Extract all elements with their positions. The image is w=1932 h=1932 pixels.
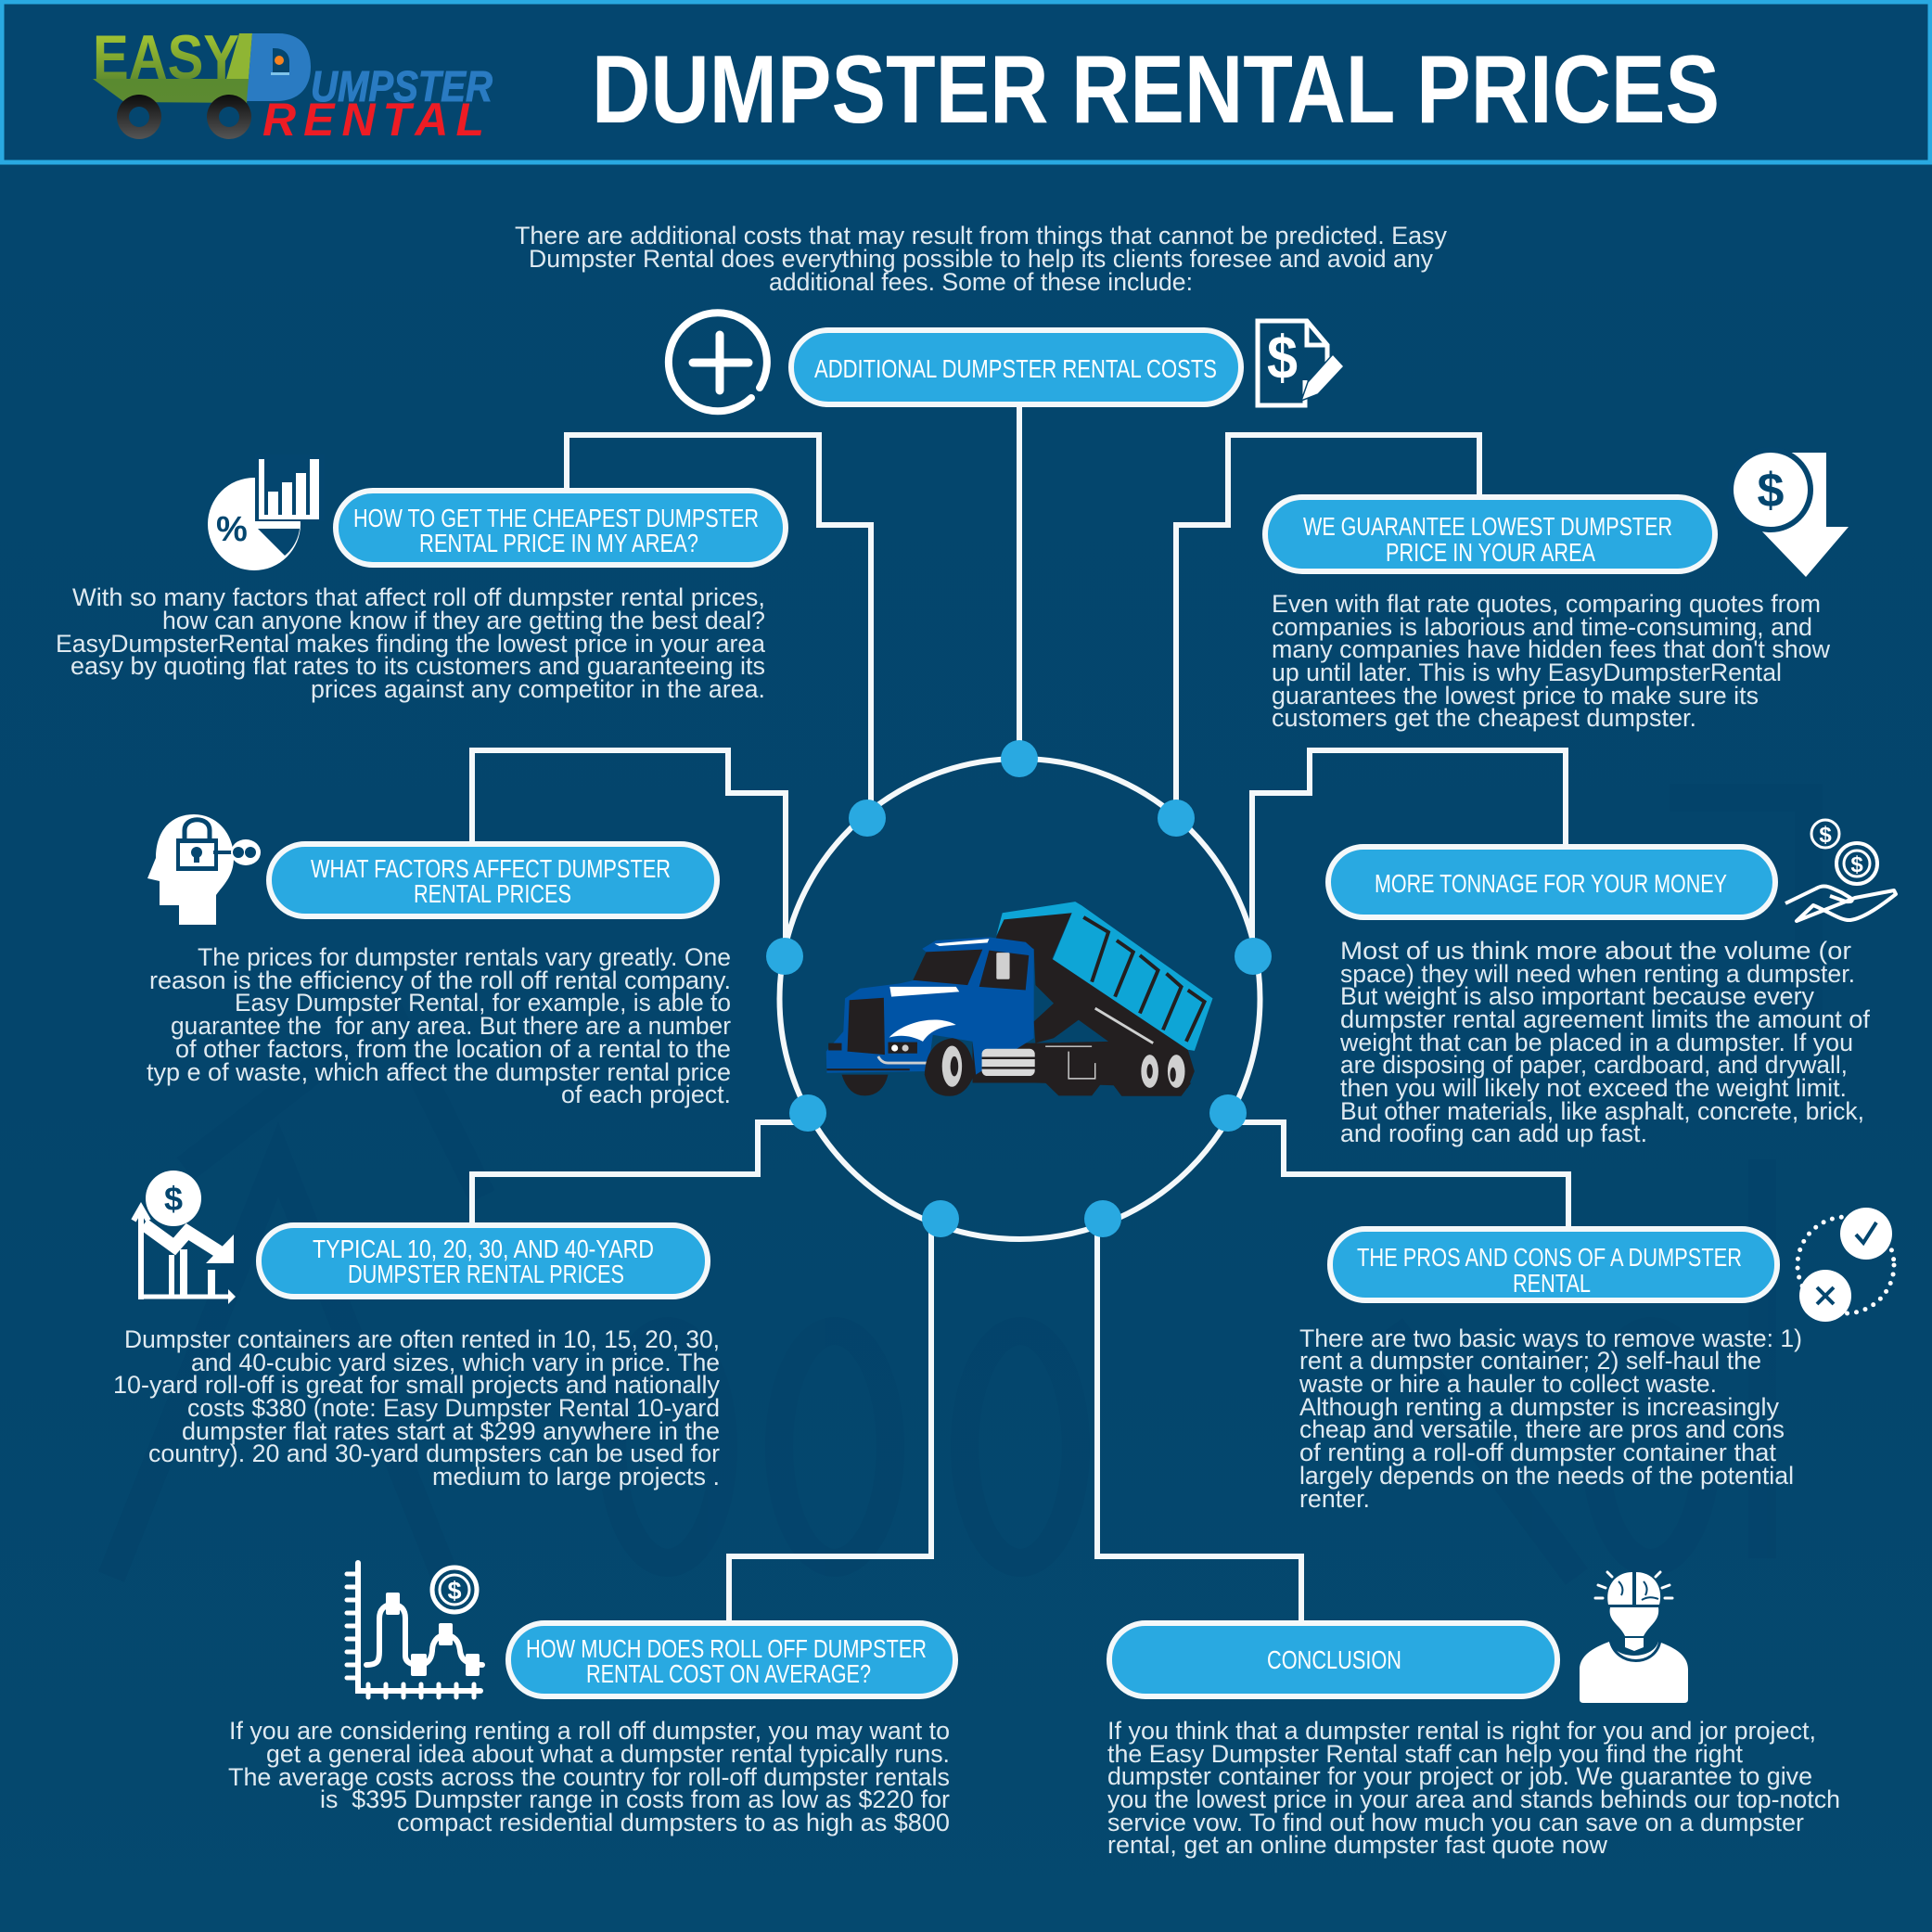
body text: easy by quoting flat rates to its customers and guaranteeing its bbox=[70, 652, 765, 680]
icon: hand with coins: $ bbox=[1850, 852, 1863, 877]
heading pill: ADDITIONAL DUMPSTER RENTAL COSTS bbox=[814, 354, 1217, 383]
body text: dumpster rental agreement limits the amount of bbox=[1340, 1005, 1870, 1033]
body text: largely depends on the needs of the potential bbox=[1299, 1462, 1794, 1490]
body text: country). 20 and 30-yard dumpsters can be used for bbox=[148, 1439, 720, 1467]
intro text: Dumpster Rental does everything possible to help its clients foresee and avoid any bbox=[529, 245, 1433, 273]
body text: get a general idea about what a dumpster rental typically runs. bbox=[266, 1740, 950, 1768]
body text: reason is the efficiency of the roll off rental company. bbox=[149, 966, 731, 994]
body text: is $395 Dumpster range in costs from as low as $220 for bbox=[320, 1785, 950, 1813]
icon: dollar document with pencil: $ bbox=[1267, 323, 1298, 391]
body text: The prices for dumpster rentals vary greatly. One bbox=[198, 943, 731, 971]
body text: If you are considering renting a roll off dumpster, you may want to bbox=[229, 1717, 950, 1745]
body text bbox=[56, 583, 766, 703]
body text: are disposing of paper, cardboard, and drywall, bbox=[1340, 1051, 1848, 1079]
logo: Easy Dumpster Rental bbox=[93, 22, 493, 146]
icon: person with lightbulb brain bbox=[1580, 1572, 1688, 1703]
body text: customers get the cheapest dumpster. bbox=[1272, 704, 1696, 732]
icon: hand with coins: $ bbox=[1819, 823, 1832, 848]
body text: guarantees the lowest price to make sure its bbox=[1272, 682, 1759, 710]
body text: the Easy Dumpster Rental staff can help you find the right bbox=[1107, 1740, 1743, 1768]
body text bbox=[1272, 590, 1830, 732]
body text: space) they will need when renting a dumpster. bbox=[1340, 960, 1855, 988]
body text: rent a dumpster container; 2) self-haul the bbox=[1299, 1347, 1761, 1375]
body text: If you think that a dumpster rental is right for you and jor project, bbox=[1107, 1717, 1816, 1745]
body text: But weight is also important because every bbox=[1340, 982, 1814, 1010]
icon: roll-off dumpster truck bbox=[826, 902, 1212, 1096]
body text: of renting a roll-off dumpster container that bbox=[1299, 1439, 1777, 1466]
icon: pie chart with bars bbox=[208, 454, 325, 570]
panel: we guarantee lowest price bbox=[1265, 447, 1849, 732]
body text bbox=[113, 1325, 720, 1491]
icon: dollar document with pencil bbox=[1258, 321, 1344, 405]
heading pill: HOW MUCH DOES ROLL OFF DUMPSTER bbox=[526, 1634, 927, 1663]
body text: dumpster container for your project or job. We guarantee to give bbox=[1107, 1762, 1812, 1790]
body text: dumpster flat rates start at $299 anywhere in the bbox=[182, 1417, 720, 1445]
panel: typical sizes and prices bbox=[113, 1171, 720, 1491]
body text: costs $380 (note: Easy Dumpster Rental 10-yard bbox=[187, 1394, 720, 1422]
body text: Even with flat rate quotes, comparing quotes from bbox=[1272, 590, 1821, 618]
body text bbox=[1107, 1717, 1840, 1859]
panel: pros and cons bbox=[1299, 1208, 1894, 1513]
body text: The average costs across the country for roll-off dumpster rentals bbox=[228, 1763, 950, 1791]
body text: of each project. bbox=[561, 1081, 731, 1108]
body text: waste or hire a hauler to collect waste. bbox=[1299, 1370, 1717, 1398]
central circle with nodes bbox=[766, 740, 1272, 1239]
body text: service vow. To find out how much you can save on a dumpster bbox=[1107, 1809, 1804, 1836]
heading pill bbox=[336, 491, 786, 565]
panel: how much on average bbox=[228, 1563, 955, 1836]
heading pill: RENTAL bbox=[1513, 1269, 1591, 1298]
panel: additional dumpster rental costs bbox=[669, 313, 1344, 411]
icon: falling price chart: $ bbox=[164, 1180, 183, 1218]
body text: With so many factors that affect roll off dumpster rental prices, bbox=[72, 583, 765, 611]
icon: head with lock and key bbox=[147, 814, 261, 925]
body text: and roofing can add up fast. bbox=[1340, 1120, 1647, 1147]
heading pill bbox=[1328, 847, 1775, 917]
intro text: additional fees. Some of these include: bbox=[769, 268, 1193, 296]
heading pill: RENTAL COST ON AVERAGE? bbox=[586, 1659, 871, 1688]
heading pill bbox=[1109, 1623, 1557, 1696]
body text bbox=[147, 943, 731, 1108]
icon: plus circle bbox=[669, 313, 767, 411]
icon: price line chart: $ bbox=[447, 1577, 462, 1605]
body text: companies is laborious and time-consuming, and bbox=[1272, 613, 1812, 641]
connector lines bbox=[472, 406, 1568, 1621]
body text: But other materials, like asphalt, concrete, brick, bbox=[1340, 1097, 1864, 1125]
body text: weight that can be placed in a dumpster. If you bbox=[1339, 1029, 1853, 1056]
icon: check and cross bbox=[1798, 1208, 1894, 1322]
icon: dollar with down arrow: $ bbox=[1758, 464, 1785, 518]
panel: more tonnage bbox=[1328, 820, 1896, 1147]
body text: cheap and versatile, there are pros and cons bbox=[1299, 1415, 1785, 1443]
body text: how can anyone know if they are getting the best deal? bbox=[162, 607, 765, 634]
heading pill bbox=[1265, 497, 1715, 571]
intro text bbox=[515, 222, 1447, 296]
body text: Easy Dumpster Rental, for example, is able to bbox=[235, 989, 731, 1017]
heading pill: WHAT FACTORS AFFECT DUMPSTER bbox=[311, 854, 671, 883]
body text: of other factors, from the location of a rental to the bbox=[175, 1035, 731, 1063]
body text: then you will likely not exceed the weight limit. bbox=[1340, 1074, 1847, 1102]
body text: Although renting a dumpster is increasingly bbox=[1299, 1393, 1779, 1421]
icon: dollar with down arrow bbox=[1728, 447, 1849, 577]
heading pill: DUMPSTER RENTAL PRICES bbox=[348, 1260, 624, 1288]
body text: There are two basic ways to remove waste: 1) bbox=[1299, 1324, 1802, 1352]
heading pill: RENTAL PRICES bbox=[414, 879, 571, 908]
title: DUMPSTER RENTAL PRICES bbox=[592, 36, 1720, 144]
logo: Easy Dumpster Rental: RENTAL bbox=[262, 94, 484, 146]
logo: Easy Dumpster Rental: EASY bbox=[93, 22, 239, 93]
heading pill: THE PROS AND CONS OF A DUMPSTER bbox=[1357, 1243, 1742, 1272]
heading pill bbox=[1330, 1229, 1777, 1300]
heading pill: HOW TO GET THE CHEAPEST DUMPSTER bbox=[353, 504, 759, 532]
header banner bbox=[2, 2, 1930, 162]
body text bbox=[1299, 1324, 1802, 1513]
body text: rental, get an online dumpster fast quote now bbox=[1107, 1831, 1607, 1859]
body text: many companies have hidden fees that don't show bbox=[1272, 635, 1830, 663]
body text: Most of us think more about the volume (or bbox=[1340, 937, 1851, 965]
body text: medium to large projects . bbox=[432, 1463, 720, 1491]
intro text: There are additional costs that may result from things that cannot be predicted. Easy bbox=[515, 222, 1447, 249]
heading pill: TYPICAL 10, 20, 30, AND 40-YARD bbox=[313, 1235, 654, 1263]
heading pill: WE GUARANTEE LOWEST DUMPSTER bbox=[1303, 512, 1672, 541]
body text: prices against any competitor in the area. bbox=[311, 675, 765, 703]
body text: guarantee the for any area. But there are a number bbox=[171, 1012, 731, 1040]
heading pill bbox=[791, 330, 1241, 404]
icon: pie chart with bars: % bbox=[216, 510, 248, 549]
body text bbox=[228, 1717, 950, 1836]
icon: hand with coins bbox=[1785, 820, 1896, 921]
body text: and 40-cubic yard sizes, which vary in price. The bbox=[191, 1349, 720, 1376]
panel: how to get the cheapest bbox=[56, 454, 786, 703]
body text: you the lowest price in your area and stands behinds our top-notch bbox=[1107, 1785, 1840, 1813]
heading pill: CONCLUSION bbox=[1267, 1645, 1401, 1674]
body text: Dumpster containers are often rented in 10, 15, 20, 30, bbox=[124, 1325, 720, 1353]
logo: Easy Dumpster Rental: UMPSTER bbox=[311, 62, 493, 110]
body text: EasyDumpsterRental makes finding the lowest price in your area bbox=[56, 630, 766, 658]
heading pill: PRICE IN YOUR AREA bbox=[1386, 538, 1595, 567]
heading pill bbox=[259, 1225, 708, 1297]
body text: 10-yard roll-off is great for small projects and nationally bbox=[113, 1371, 720, 1399]
icon: falling price chart bbox=[134, 1171, 236, 1304]
heading pill: MORE TONNAGE FOR YOUR MONEY bbox=[1375, 869, 1727, 898]
body text: compact residential dumpsters to as high as $800 bbox=[397, 1809, 950, 1836]
body text: renter. bbox=[1299, 1485, 1370, 1513]
body text bbox=[1339, 937, 1870, 1147]
heading pill bbox=[269, 844, 717, 916]
heading pill: RENTAL PRICE IN MY AREA? bbox=[419, 529, 698, 557]
panel: what factors affect prices bbox=[147, 814, 731, 1108]
panel: conclusion bbox=[1107, 1572, 1840, 1859]
body text: up until later. This is why EasyDumpsterRental bbox=[1272, 659, 1782, 686]
body text: typ e of waste, which affect the dumpster rental price bbox=[147, 1058, 731, 1086]
icon: price line chart bbox=[347, 1563, 482, 1697]
heading pill bbox=[508, 1623, 955, 1696]
